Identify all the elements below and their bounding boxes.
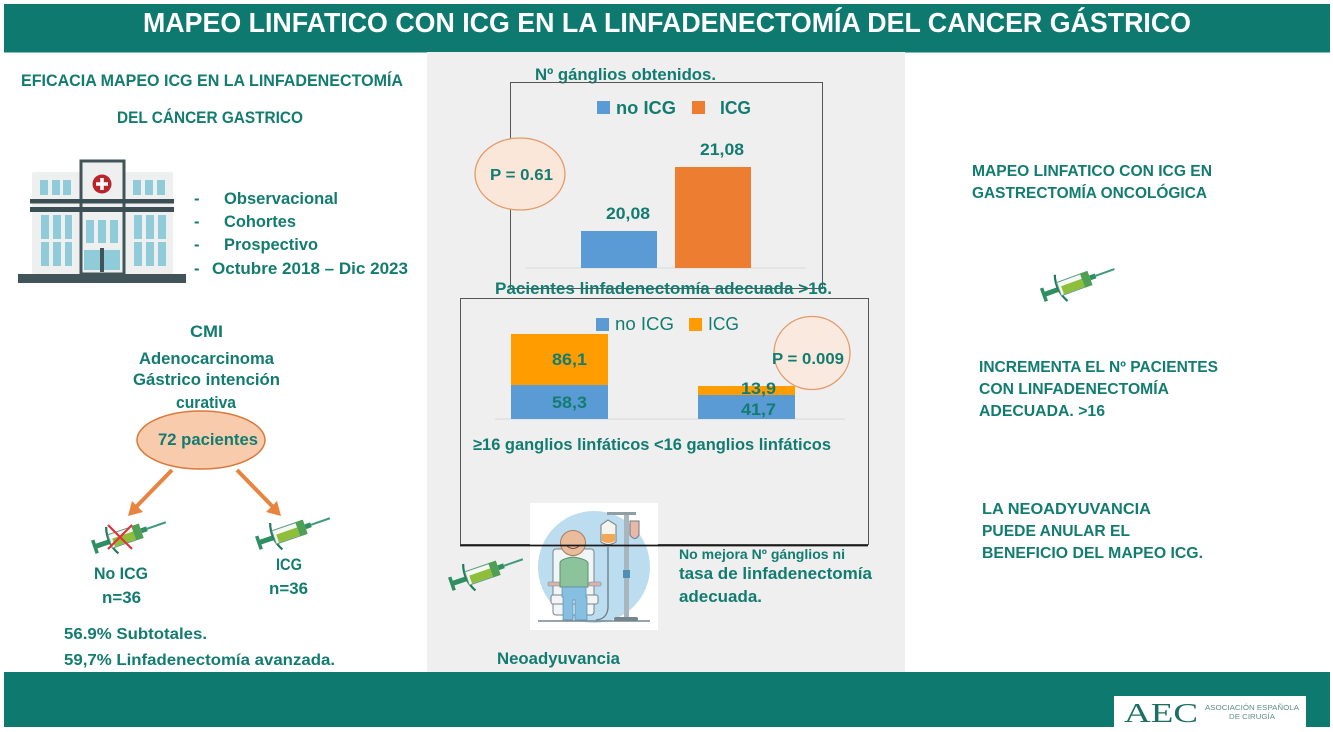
study design list: - [194, 236, 200, 254]
stacked bar: 16 or more nodes: 86,1 [552, 350, 587, 369]
callout: P = 0.61: P = 0.61 [490, 167, 553, 184]
top banner [4, 4, 1330, 52]
label: ICG [269, 556, 308, 598]
population text: Adenocarcinoma [139, 349, 275, 368]
legend chart 1: no ICG [616, 97, 676, 118]
study design list: Octubre 2018 – Dic 2023 [212, 260, 408, 278]
conclusion 2: CON LINFADENECTOMÍA [979, 381, 1169, 398]
icon: syringe conclusions [1039, 255, 1119, 308]
left heading [21, 71, 403, 127]
conclusion 1 [972, 163, 1212, 202]
surgery statistics: 59,7% Linfadenectomía avanzada. [64, 652, 335, 669]
population text [133, 322, 280, 412]
chart: ganglios obtenidos: Nº gánglios obtenidos. [535, 66, 716, 84]
surgery statistics [64, 626, 335, 669]
chart: linfadenectomia adecuada: Pacientes linfadenectomía adecuada >16. [495, 280, 832, 298]
title: MAPEO LINFATICO CON ICG EN LA LINFADENECTOMÍA DEL CANCER GÁSTRICO [143, 7, 1191, 38]
conclusion 3 [982, 501, 1203, 562]
conclusion 1: GASTRECTOMÍA ONCOLÓGICA [972, 184, 1207, 202]
callout: P = 0.009: P = 0.009 [772, 351, 844, 368]
stacked bar: under 16 nodes: 41,7 [741, 400, 776, 419]
callout: P = 0.61 [475, 138, 565, 210]
icon: crossed syringe [90, 508, 170, 560]
study design list: Observacional [224, 190, 338, 208]
bar: no ICG 20,08: 20,08 [606, 204, 650, 223]
stacked bar: under 16 nodes: 13,9 [741, 379, 776, 398]
legend chart 1: ICG [720, 97, 751, 118]
stacked bar: under 16 nodes [698, 379, 795, 419]
study design list [194, 190, 408, 278]
conclusion 2: ADECUADA. >16 [979, 403, 1105, 420]
population text: Gástrico intención [133, 370, 280, 389]
arrow: to no ICG [128, 470, 172, 516]
label: no ICG: No ICG [94, 565, 148, 583]
ellipse: 72 pacientes [137, 411, 265, 469]
stacked bar: 16 or more nodes: 58,3 [552, 393, 587, 412]
legend chart 2 [596, 314, 739, 334]
ellipse: 72 pacientes: 72 pacientes [158, 431, 258, 449]
label: ICG: n=36 [269, 580, 308, 598]
left heading: EFICACIA MAPEO ICG EN LA LINFADENECTOMÍA [21, 71, 403, 90]
conclusion 2: INCREMENTA EL Nº PACIENTES [979, 359, 1218, 376]
logo: AEC: ASOCIACIÓN ESPAÑOLA [1205, 703, 1299, 712]
neoadjuvant result text: tasa de linfadenectomía [679, 565, 873, 583]
legend chart 2: ICG [708, 314, 739, 334]
logo: AEC: AEC [1124, 698, 1198, 728]
study design list: - [194, 190, 200, 208]
bottom banner [4, 672, 1330, 727]
bar: ICG 21,08 [675, 140, 751, 268]
callout: P = 0.009 [772, 316, 850, 390]
neoadjuvant label: Neoadyuvancia [497, 650, 621, 668]
study design list: - [194, 213, 200, 231]
divider line [460, 544, 868, 546]
conclusion 3: BENEFICIO DEL MAPEO ICG. [982, 545, 1203, 562]
legend chart 2: no ICG [615, 314, 674, 334]
chart: linfadenectomia adecuada [460, 280, 868, 544]
chart: ganglios obtenidos [510, 66, 822, 288]
neoadjuvant result text: No mejora Nº gánglios ni [679, 547, 845, 562]
label: no ICG: n=36 [102, 589, 141, 607]
bar: ICG 21,08: 21,08 [700, 140, 744, 159]
conclusion 3: LA NEOADYUVANCIA [982, 501, 1151, 518]
surgery statistics: 56.9% Subtotales. [64, 626, 207, 643]
center panel background [427, 52, 905, 672]
icon: syringe ICG [254, 504, 334, 556]
conclusion 2 [979, 359, 1218, 420]
category labels: ≥16 ganglios linfáticos <16 ganglios linfáticos [473, 436, 831, 454]
stacked bar: 16 or more nodes [511, 334, 608, 419]
label: ICG: ICG [276, 556, 302, 574]
icon: syringe neoadjuvant [447, 545, 527, 597]
legend chart 1 [597, 97, 751, 118]
population text: curativa [176, 393, 237, 412]
left heading: DEL CÁNCER GASTRICO [117, 108, 303, 127]
logo: AEC [1114, 696, 1306, 728]
study design list: Cohortes [224, 213, 296, 231]
neoadjuvant result text [679, 547, 873, 606]
neoadjuvant result text: adecuada. [679, 588, 762, 606]
icon: patient receiving infusion [530, 503, 658, 630]
population text: CMI [190, 322, 223, 341]
icon: hospital [18, 161, 186, 283]
logo: AEC: DE CIRUGÍA [1229, 712, 1275, 721]
label: no ICG [94, 565, 148, 607]
arrow: to ICG [237, 470, 281, 516]
conclusion 1: MAPEO LINFATICO CON ICG EN [972, 163, 1212, 180]
conclusion 3: PUEDE ANULAR EL [982, 523, 1130, 540]
study design list: Prospectivo [224, 236, 318, 254]
bar: no ICG 20,08 [581, 204, 657, 268]
study design list: - [194, 260, 200, 278]
